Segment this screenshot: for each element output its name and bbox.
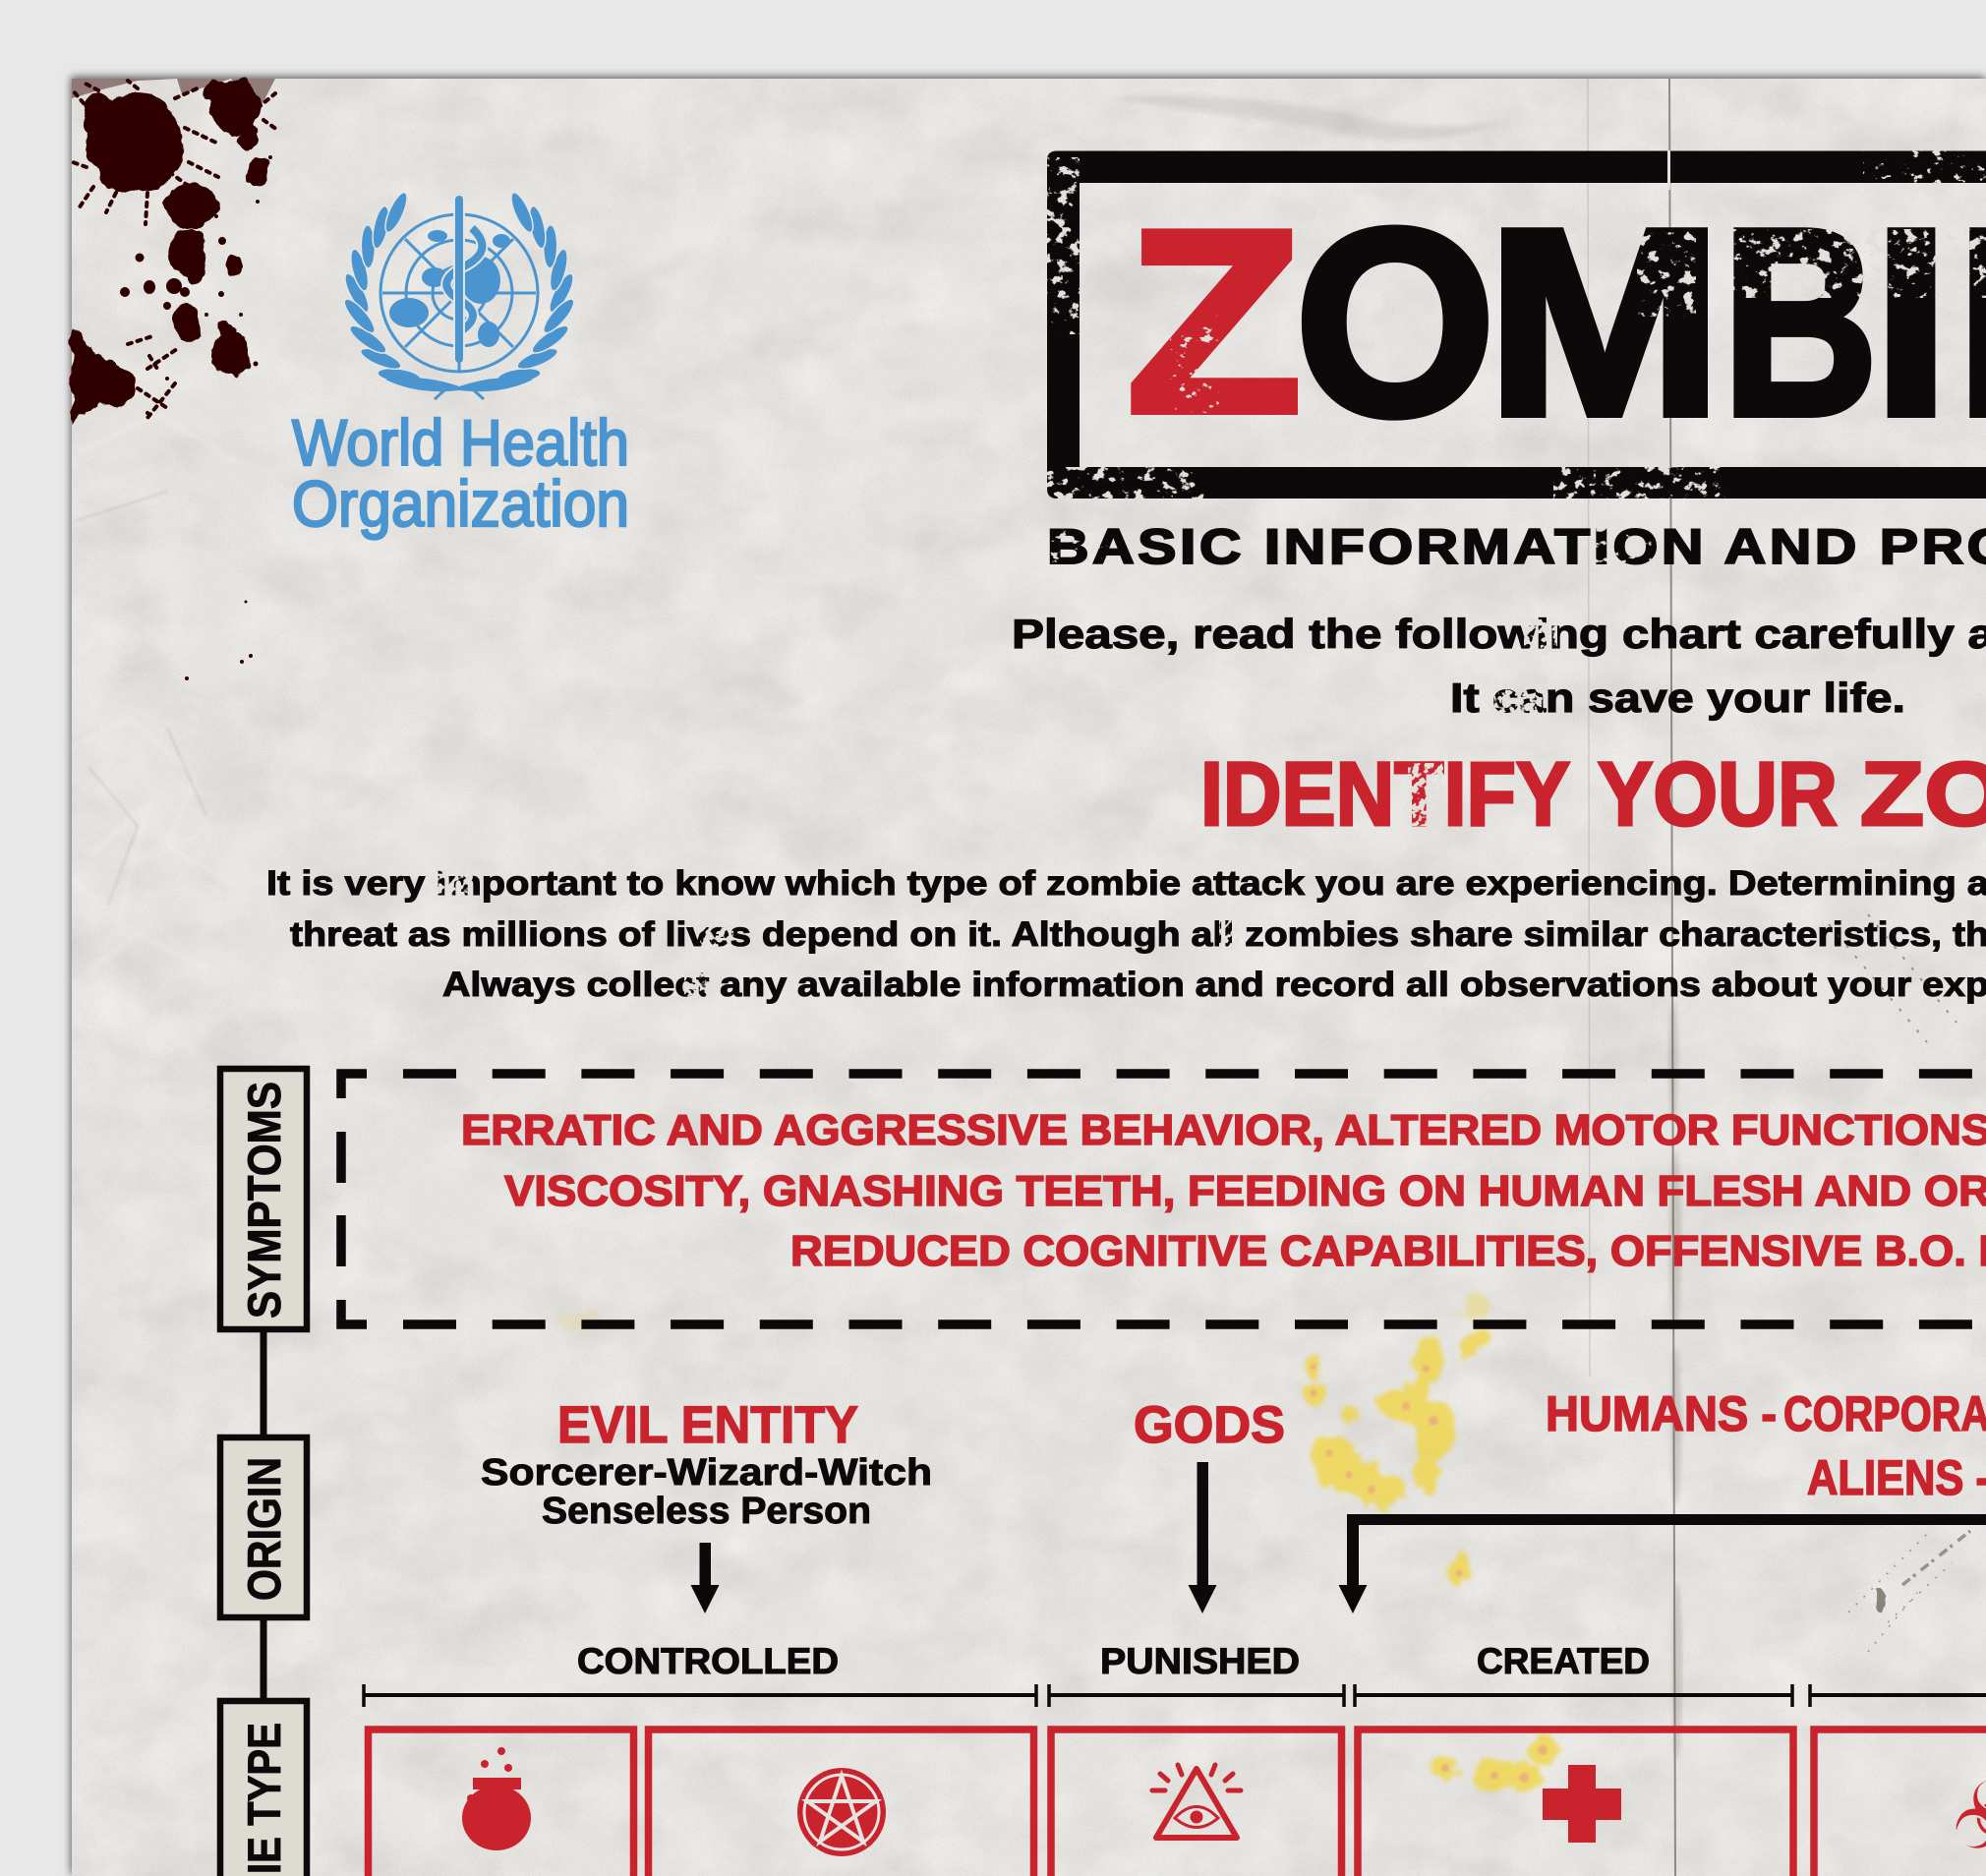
intro text: It can save your life. (1450, 674, 1905, 721)
stains (560, 1292, 1557, 1792)
icon: medical cross (1543, 1765, 1621, 1843)
title text: I (1873, 175, 1950, 471)
arrow: gods to punished (1188, 1462, 1217, 1613)
category headings: CREATED (1477, 1641, 1650, 1681)
arrow: evil entity to controlled (690, 1543, 720, 1613)
icon: cauldron (462, 1747, 531, 1850)
WHO logo (292, 190, 629, 540)
origin: gods: GODS (1134, 1396, 1285, 1454)
origin: evil entity: Senseless Person (542, 1491, 871, 1532)
label: zombie type: IE TYPE (238, 1723, 290, 1874)
symptoms text: REDUCED COGNITIVE CAPABILITIES, OFFENSIVE B.O. I (790, 1227, 1986, 1275)
panel: medical zombie (1358, 1729, 1793, 1876)
intro text: Please, read the following chart carefully a (1012, 611, 1986, 657)
category brackets (364, 1684, 1986, 1707)
title text (1127, 175, 1986, 471)
category headings: CONTROLLED (577, 1641, 839, 1681)
label: origin: ORIGIN (238, 1457, 290, 1601)
frame border (1047, 151, 1986, 498)
arrow: humans to created (1339, 1514, 1986, 1613)
origin: evil entity: EVIL ENTITY (557, 1396, 858, 1454)
label: origin (220, 1437, 307, 1617)
symptoms text: VISCOSITY, GNASHING TEETH, FEEDING ON HUMAN FLESH AND OR (504, 1167, 1986, 1215)
body text (266, 864, 1986, 1004)
heading: identify your zombie: IDENTIFY (1200, 744, 1570, 845)
body text: Always collect any available information and record all observations about your exp (442, 966, 1986, 1004)
title text: B (1723, 175, 1878, 471)
origin: evil entity: Sorcerer-Wizard-Witch (481, 1452, 932, 1494)
text: World Health Organization: World Health (292, 406, 629, 479)
category headings: PUNISHED (1100, 1641, 1300, 1681)
heading: identify your zombie: YOUR (1598, 744, 1838, 845)
panel: punished zombie (1051, 1729, 1341, 1876)
dirt marks (1829, 914, 1970, 1652)
text: World Health Organization (292, 406, 629, 540)
body text: It is very important to know which type of zombie attack you are experiencing. Determining a (266, 864, 1986, 903)
icon: all-seeing eye (1152, 1765, 1241, 1838)
icon: pentagram (797, 1768, 886, 1856)
title text: O (1295, 175, 1495, 471)
body text: threat as millions of lives depend on it. Although all zombies share similar characteristics, th (290, 915, 1986, 954)
origin: humans and aliens (1546, 1386, 1986, 1505)
label: symptoms (220, 1069, 307, 1329)
origin: humans and aliens: HUMANS - (1546, 1386, 1777, 1441)
symptoms text: ERRATIC AND AGGRESSIVE BEHAVIOR, ALTERED MOTOR FUNCTIONS (461, 1106, 1986, 1154)
title frame: ZOMBIE (1047, 150, 1986, 498)
row labels and connectors (220, 1069, 307, 1876)
connector lines (260, 1332, 267, 1701)
heading: identify your zombie: ZO (1860, 744, 1986, 845)
label: zombie type (220, 1701, 307, 1876)
symptoms text (461, 1106, 1986, 1275)
heading: identify your zombie (1200, 744, 1986, 845)
intro text (1012, 611, 1986, 721)
panel: biohazard zombie (1814, 1729, 1986, 1876)
panel: occult zombie (649, 1729, 1034, 1876)
title text: Z (1127, 176, 1302, 466)
category headings (577, 1641, 1650, 1681)
dashed frame (341, 1074, 1986, 1324)
panel: potion zombie (368, 1729, 633, 1876)
label: symptoms: SYMPTOMS (238, 1082, 290, 1319)
text: World Health Organization: Organization (292, 467, 629, 540)
subtitle: BASIC INFORMATION AND PRO (1047, 519, 1986, 574)
blood splatter (72, 79, 277, 680)
origin: evil entity (481, 1396, 932, 1532)
icon: WHO emblem (340, 190, 578, 399)
distress overlay (1047, 150, 1986, 498)
panel: symptoms (341, 1074, 1986, 1324)
title text: M (1487, 175, 1723, 471)
